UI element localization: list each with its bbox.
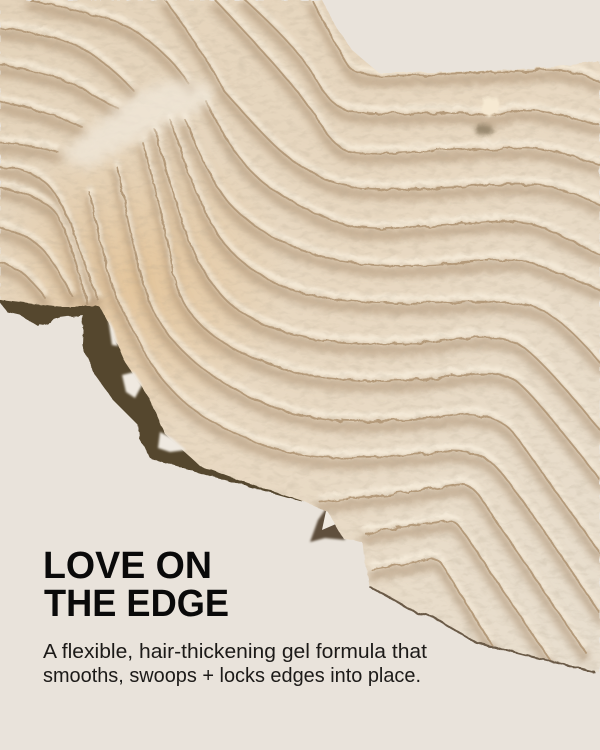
heading: LOVE ON: [43, 545, 212, 587]
heading: THE EDGE: [44, 583, 229, 625]
product dent: [482, 98, 499, 118]
body text: smooths, swoops + locks edges into place.: [43, 665, 421, 687]
dark shadow along swatch edge: [0, 292, 330, 506]
edge gaps: [322, 511, 336, 530]
dark band gaps: [108, 318, 186, 452]
body text: A flexible, hair-thickening gel formula that: [43, 641, 427, 663]
dark speck: [475, 124, 493, 136]
pale blended seam: [60, 80, 215, 170]
lower edge shadow: [370, 587, 595, 672]
left lower tail: [310, 500, 345, 542]
